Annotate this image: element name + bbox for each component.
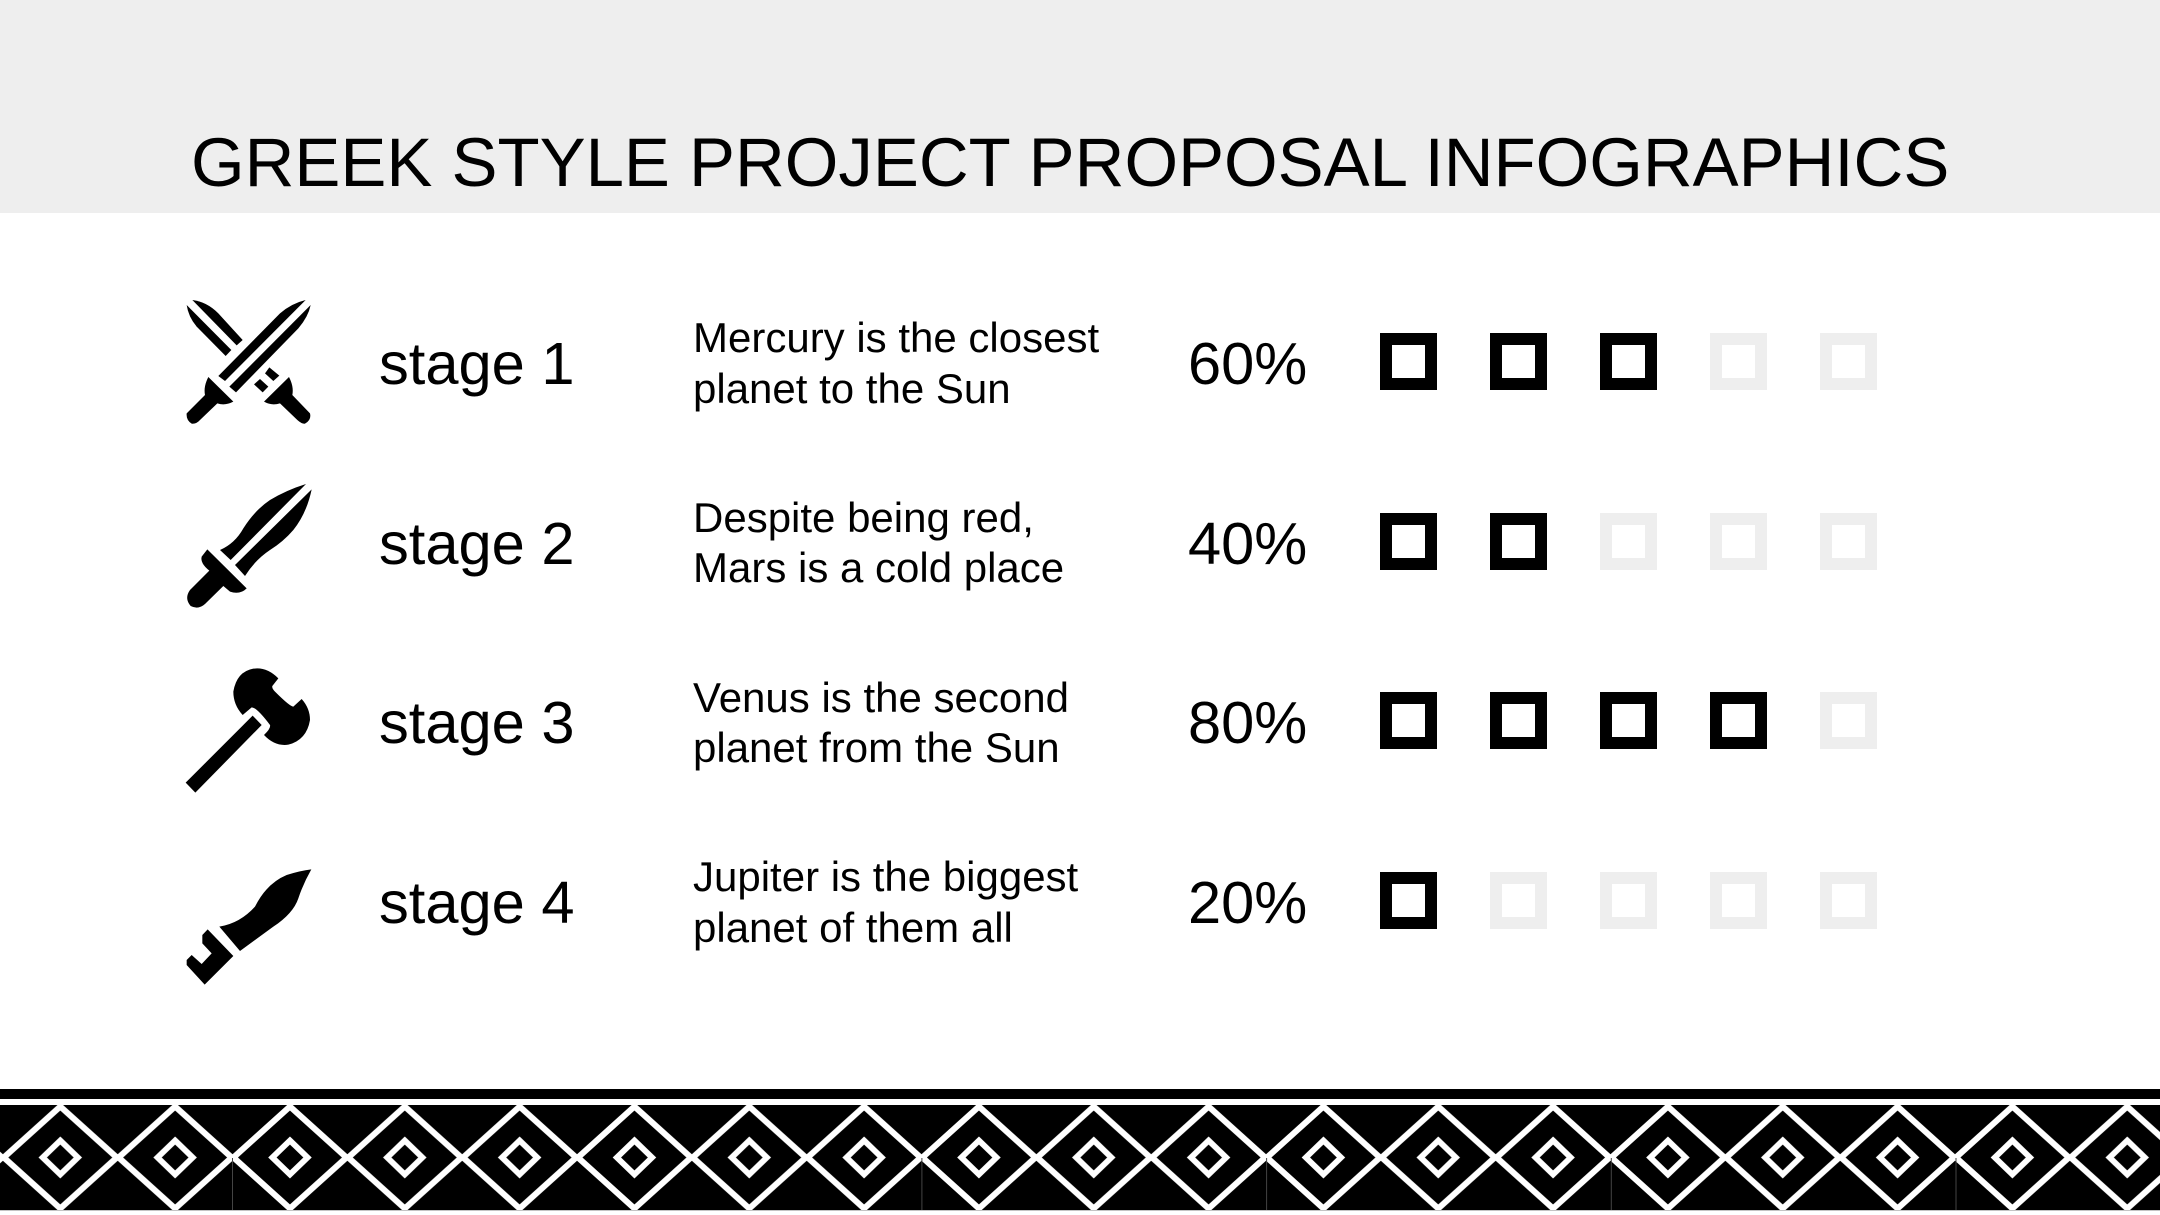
progress squares: 3 of 5 [1386, 339, 1871, 384]
icon: curved sword [187, 869, 311, 985]
stage label: stage 2 [379, 510, 574, 577]
percentage: 40% [1188, 510, 1307, 577]
row: stage 3 [186, 668, 1871, 793]
progress squares: 1 of 5 [1386, 878, 1871, 923]
description: Despite being red, [693, 494, 1034, 541]
description: planet of them all [693, 904, 1013, 951]
progress squares: 4 of 5 [1386, 698, 1871, 743]
stage label: stage 1 [379, 330, 574, 397]
title: GREEK STYLE PROJECT PROPOSAL INFOGRAPHICS [191, 124, 1949, 201]
percentage: 20% [1188, 869, 1307, 936]
row: stage 1 [187, 300, 1871, 424]
progress squares: 2 of 5 [1386, 519, 1871, 564]
icon: battle axe [186, 668, 310, 793]
footer: greek pattern band [0, 1089, 2160, 1211]
description: planet from the Sun [693, 724, 1060, 771]
row: stage 4 [187, 853, 1871, 985]
icon: dagger [187, 484, 312, 608]
description: Mercury is the closest [693, 314, 1099, 361]
percentage: 60% [1188, 330, 1307, 397]
description: Venus is the second [693, 674, 1069, 721]
description: Jupiter is the biggest [693, 853, 1079, 900]
stage label: stage 4 [379, 869, 574, 936]
percentage: 80% [1188, 689, 1307, 756]
row: stage 2 [187, 484, 1871, 608]
description: planet to the Sun [693, 365, 1011, 412]
description: Mars is a cold place [693, 544, 1064, 591]
header band [0, 0, 2160, 213]
stage label: stage 3 [379, 689, 574, 756]
icon: crossed swords [187, 300, 311, 424]
